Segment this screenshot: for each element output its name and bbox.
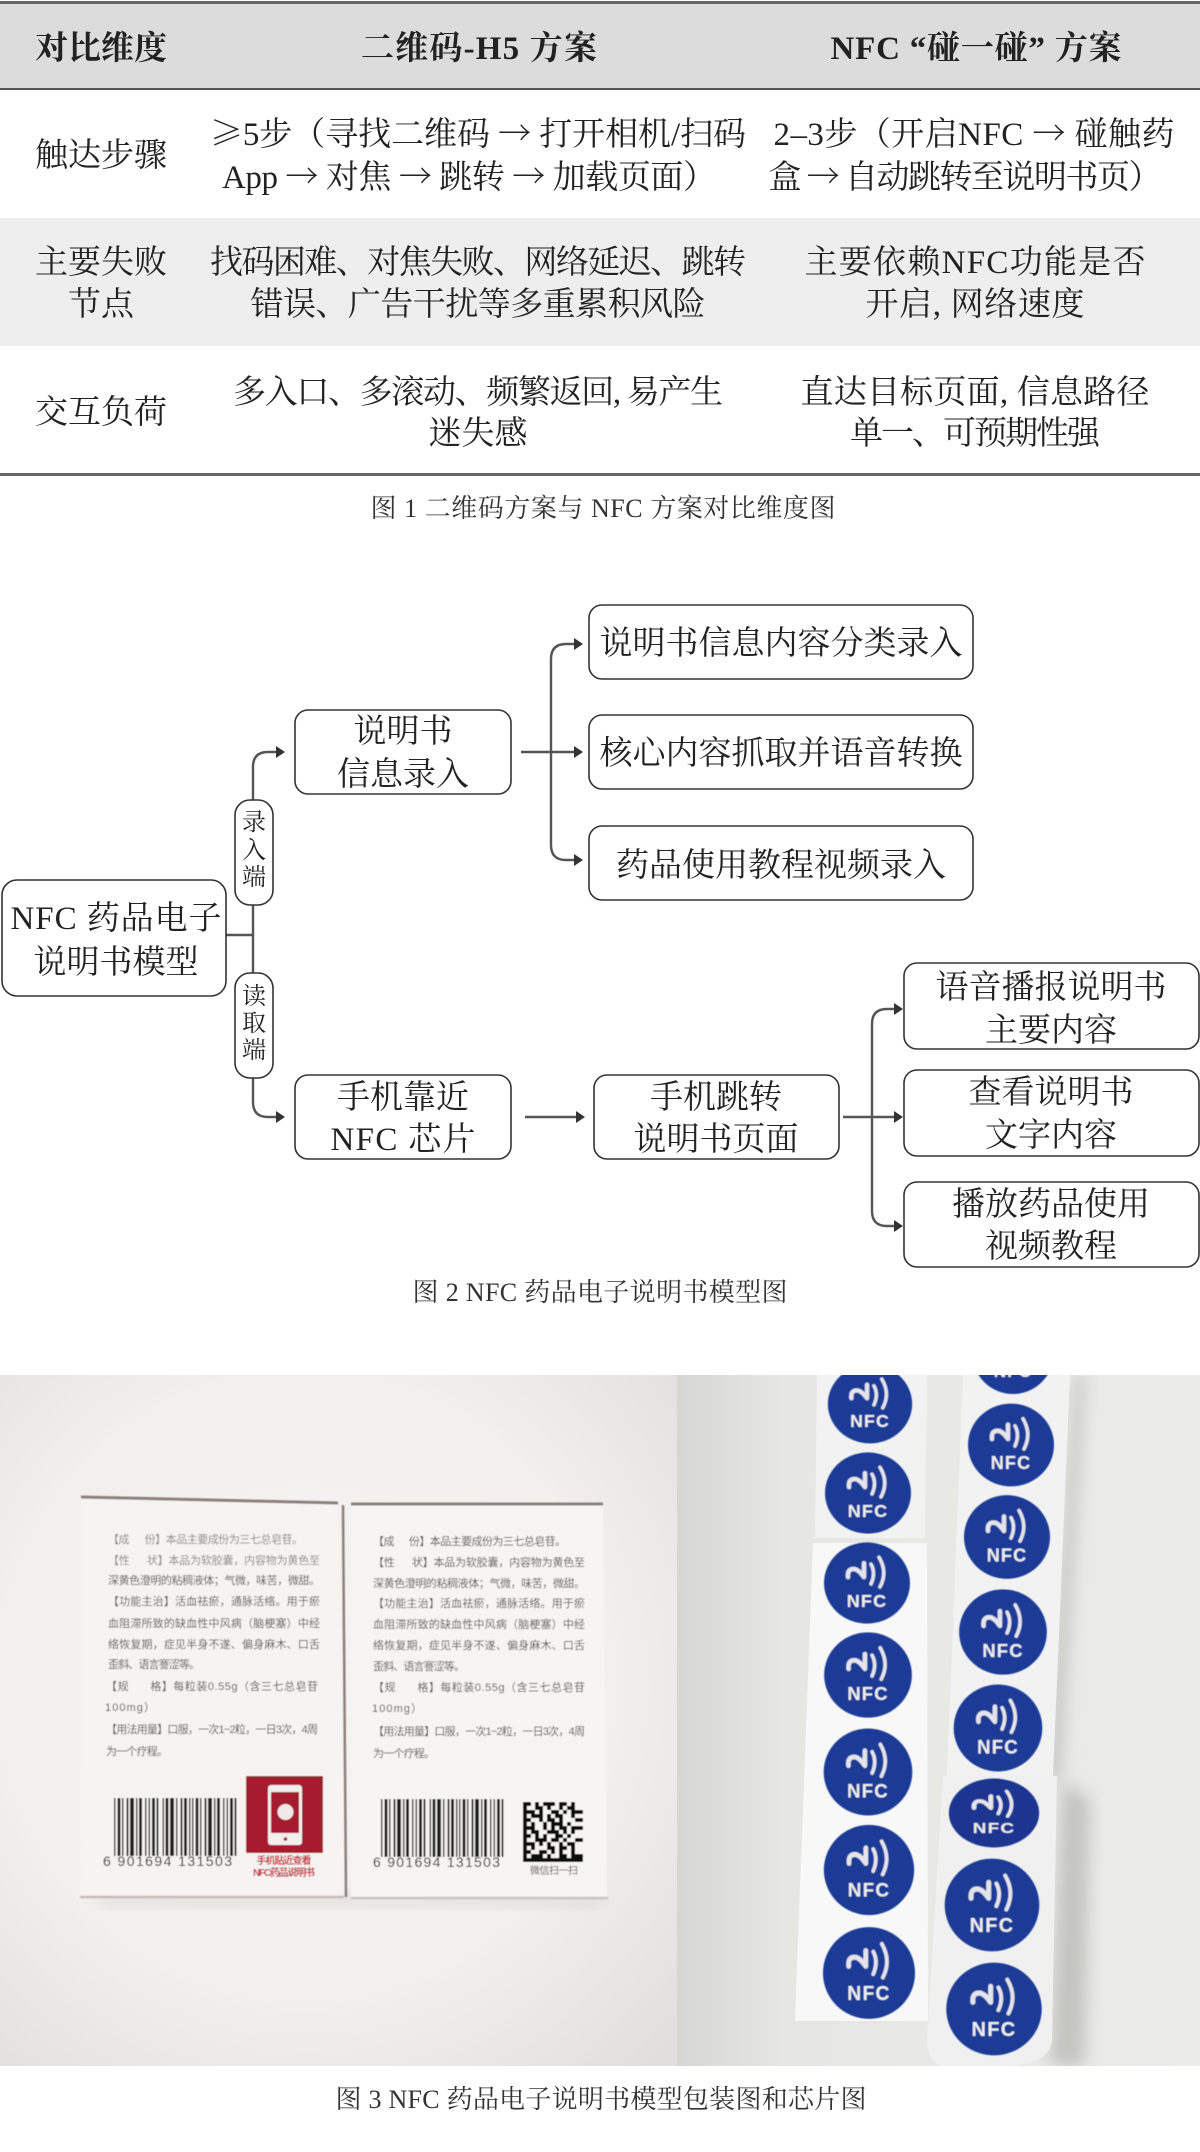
node: 播放视频 — [904, 1182, 1199, 1267]
right box: 歪斜、语言謇涩等。 — [373, 1659, 465, 1673]
barcode: 6 901694 131503 — [103, 1853, 232, 1869]
node: 播放视频: 视频教程 — [985, 1228, 1117, 1265]
pill: 录入端 — [235, 800, 273, 905]
right box: 【性 状】本品为软胶囊，内容物为黄色至 — [373, 1555, 585, 1569]
left box: 【成 份】本品主要成份为三七总皂苷。 — [108, 1532, 303, 1546]
table row: 主要失败节点: 找码困难、对焦失败、网络延迟、跳转 — [210, 244, 746, 281]
caption: figure 2: 图 2 NFC 药品电子说明书模型图 — [412, 1278, 788, 1307]
NFC red tag: NFC药品说明书 — [253, 1866, 315, 1879]
right box — [351, 1504, 608, 1898]
pill: 录入端: 录 — [242, 810, 266, 836]
NFC red tag: 手机贴近查看 — [256, 1854, 312, 1867]
table row: 交互负荷: 迷失感 — [428, 415, 528, 452]
pill: 录入端: 端 — [242, 864, 266, 891]
node: 手机靠近: 手机靠近 — [337, 1079, 469, 1116]
pill: 录入端: 入 — [242, 837, 266, 864]
left box: 深黄色澄明的粘稠液体；气微，味苦，微甜。 — [108, 1573, 320, 1587]
right column stickers: NFC — [973, 1820, 1015, 1837]
right box: 【规 格】每粒装0.55g（含三七总皂苷 — [373, 1680, 585, 1694]
table row: 主要失败节点: 开启, 网络速度 — [866, 286, 1084, 323]
root node: NFC 药品电子 — [10, 900, 222, 937]
node: 语音转换 — [589, 715, 973, 789]
caption: figure 1: 图 1 二维码方案与 NFC 方案对比维度图 — [370, 494, 836, 523]
node: 分类录入: 说明书信息内容分类录入 — [600, 625, 962, 662]
node: 手机跳转: 说明书页面 — [634, 1121, 798, 1158]
right box: 为一个疗程。 — [373, 1746, 435, 1760]
left column stickers: NFC — [847, 1683, 889, 1704]
left box: 歪斜、语言謇涩等。 — [108, 1657, 200, 1671]
left box: 络恢复期，症见半身不遂、偏身麻木、口舌 — [108, 1637, 320, 1651]
table row: 交互负荷: 单一、可预期性强 — [850, 415, 1101, 452]
panel: comparison table — [0, 1, 1200, 476]
QR code — [523, 1804, 583, 1860]
sticker paper strips — [795, 1375, 1070, 2066]
left box: 血阻滞所致的缺血性中风病（脑梗塞）中经 — [108, 1616, 320, 1630]
table row: 主要失败节点: 主要失败 — [35, 244, 167, 281]
left column stickers — [823, 1365, 915, 2019]
right column stickers: NFC — [991, 1453, 1031, 1473]
node: 视频录入 — [589, 826, 973, 900]
right box: 【用法用量】口服，一次1~2粒，一日3次，4周 — [373, 1724, 585, 1738]
NFC red tag — [246, 1776, 323, 1879]
table row: 主要失败节点: 主要依赖NFC功能是否 — [804, 244, 1146, 281]
table header band: NFC “碰一碰” 方案 — [830, 30, 1122, 67]
root node: 说明书模型 — [34, 944, 198, 981]
right box: 【功能主治】活血祛瘀，通脉活络。用于瘀 — [373, 1596, 585, 1610]
table header band: 二维码-H5 方案 — [361, 30, 597, 67]
pill: 读取端: 读 — [242, 983, 266, 1010]
node: 语音转换: 核心内容抓取并语音转换 — [600, 735, 962, 772]
right box: 血阻滞所致的缺血性中风病（脑梗塞）中经 — [373, 1617, 585, 1631]
barcode: 6 901694 131503 — [373, 1854, 500, 1870]
right column stickers: NFC — [987, 1545, 1027, 1566]
node: 视频录入: 药品使用教程视频录入 — [616, 847, 946, 884]
table row: 触达步骤: App → 对焦 → 跳转 → 加载页面） — [222, 151, 716, 198]
node: 语音播报: 语音播报说明书 — [936, 969, 1166, 1006]
pill: 读取端 — [235, 973, 273, 1078]
left box: 100mg） — [105, 1701, 155, 1714]
WeChat scan label: 微信扫一扫 — [530, 1864, 578, 1877]
right box: 络恢复期，症见半身不遂、偏身麻木、口舌 — [373, 1638, 585, 1652]
node: 查看文字 — [904, 1070, 1199, 1156]
left box: 【性 状】本品为软胶囊，内容物为黄色至 — [108, 1553, 320, 1567]
node: 分类录入 — [589, 605, 973, 679]
right column stickers: NFC — [970, 1915, 1014, 1937]
left box: 【用法用量】口服，一次1~2粒，一日3次，4周 — [106, 1722, 318, 1736]
left column stickers: NFC — [848, 1501, 888, 1521]
right column stickers: NFC — [977, 1736, 1019, 1757]
right box: 100mg） — [372, 1702, 422, 1715]
left box: 为一个疗程。 — [106, 1744, 168, 1758]
table row: 触达步骤: 盒 → 自动跳转至说明书页） — [768, 151, 1162, 198]
left box: 【规 格】每粒装0.55g（含三七总皂苷 — [106, 1679, 318, 1693]
right box: 深黄色澄明的粘稠液体；气微，味苦，微甜。 — [373, 1576, 585, 1590]
connectors and arrows — [226, 638, 903, 1232]
right column stickers: NFC — [971, 2019, 1017, 2041]
table row: 交互负荷: 直达目标页面, 信息路径 — [800, 374, 1150, 411]
node: 手机靠近 — [295, 1075, 511, 1159]
table row: 主要失败节点 — [0, 218, 1200, 346]
table header band: 对比维度 — [35, 30, 167, 67]
node: 说明书信息录入: 说明书 — [354, 713, 452, 750]
table row: 触达步骤: 触达步骤 — [35, 137, 167, 174]
panel: NFC model flow diagram — [2, 605, 1199, 1267]
right column stickers — [945, 1312, 1054, 2055]
table row: 触达步骤 — [35, 108, 1174, 198]
left column stickers: NFC — [847, 1982, 891, 2005]
table header band — [0, 1, 1200, 90]
node: 说明书信息录入: 信息录入 — [337, 756, 469, 793]
node: 查看文字: 查看说明书 — [968, 1074, 1134, 1111]
node: 播放视频: 播放药品使用 — [952, 1186, 1150, 1223]
left column stickers: NFC — [847, 1780, 889, 1801]
node: 手机靠近: NFC 芯片 — [330, 1121, 476, 1158]
node: 语音播报: 主要内容 — [985, 1012, 1117, 1049]
table row: 交互负荷: 多入口、多滚动、频繁返回, 易产生 — [233, 374, 723, 411]
node: 手机跳转 — [594, 1075, 839, 1159]
photo: NFC sticker rolls — [677, 1312, 1200, 2066]
root node — [2, 880, 226, 996]
table row: 主要失败节点: 错误、广告干扰等多重累积风险 — [250, 286, 706, 323]
left column stickers: NFC — [847, 1591, 887, 1611]
node: 语音播报 — [904, 963, 1199, 1049]
barcode — [103, 1827, 238, 1869]
right column stickers: NFC — [982, 1640, 1024, 1661]
barcode — [373, 1828, 505, 1870]
pill: 读取端: 端 — [242, 1037, 266, 1064]
node: 说明书信息录入 — [295, 710, 511, 794]
left column stickers: NFC — [848, 1879, 890, 1902]
left column stickers: NFC — [850, 1411, 890, 1431]
table row: 触达步骤: 2–3步（开启NFC → 碰触药 — [774, 108, 1174, 155]
pill: 读取端: 取 — [242, 1011, 266, 1037]
table row: 触达步骤: ≥5步（寻找二维码 → 打开相机/扫码 — [210, 108, 746, 155]
caption: figure 3: 图 3 NFC 药品电子说明书模型包装图和芯片图 — [336, 2085, 866, 2114]
photo: medicine boxes — [0, 1375, 677, 2066]
table row: 交互负荷: 交互负荷 — [35, 394, 167, 431]
node: 手机跳转: 手机跳转 — [650, 1079, 782, 1116]
right column stickers: NFC — [994, 1361, 1032, 1381]
node: 查看文字: 文字内容 — [985, 1117, 1117, 1154]
table row: 主要失败节点: 节点 — [68, 286, 135, 323]
table row: 交互负荷 — [0, 374, 1200, 476]
right box: 【成 份】本品主要成份为三七总皂苷。 — [373, 1534, 566, 1548]
left box: 【功能主治】活血祛瘀，通脉活络。用于瘀 — [108, 1594, 320, 1608]
left box — [80, 1497, 346, 1897]
